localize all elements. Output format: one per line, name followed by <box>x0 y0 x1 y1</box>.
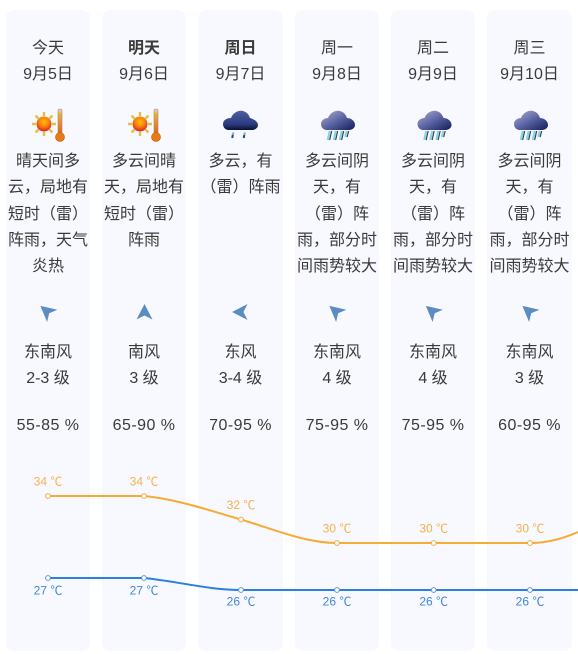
line chart: daily low temperature: 26 ℃ <box>516 594 544 608</box>
weather description: Monday: （雷）阵 <box>305 206 369 223</box>
weather description: Sunday: （雷）阵雨 <box>200 179 280 196</box>
icon: heavy showers, Wednesday <box>514 111 548 140</box>
date: 9月9日: 9月9日 <box>408 66 458 83</box>
weather description: today <box>8 152 88 275</box>
wind level: Tuesday: 4 级 <box>418 370 448 387</box>
day label: Monday: 周一 <box>321 40 353 57</box>
date: 9月7日: 9月7日 <box>216 66 265 83</box>
line chart: daily low temperature: 26 ℃ <box>323 594 351 608</box>
icon: heavy showers, Monday <box>321 111 355 140</box>
weather description: today: 阵雨，天气 <box>8 232 88 249</box>
wind arrow: tomorrow <box>136 304 152 320</box>
date: 9月10日: 9月10日 <box>500 66 559 83</box>
weather description: Monday: 天，有 <box>313 179 361 196</box>
date: 9月5日: 9月5日 <box>23 66 73 83</box>
weather description: Monday: 雨，部分时 <box>297 232 377 249</box>
wind direction: Sunday: 东风 <box>224 344 256 361</box>
icon: sunny hot, today <box>32 109 64 142</box>
wind direction: Tuesday: 东南风 <box>409 344 457 361</box>
weather description: Wednesday: 雨，部分时 <box>489 232 570 249</box>
weather description: Monday: 间雨势较大 <box>297 258 377 275</box>
humidity: Monday: 75-95 % <box>306 417 368 434</box>
weather description: today: 炎热 <box>32 258 64 275</box>
icon: sunny hot, tomorrow <box>128 109 160 142</box>
day label: Wednesday: 周三 <box>513 40 546 57</box>
wind arrow: Monday <box>324 300 346 322</box>
weather description: Tuesday: 天，有 <box>409 179 457 196</box>
line chart: daily high temperature: 34 ℃ <box>130 474 158 488</box>
panel: today column <box>6 10 90 651</box>
weather description: tomorrow: 短时（雷） <box>104 206 184 223</box>
weather description: Wednesday: 多云间阴 <box>497 153 562 170</box>
weather description: today: 晴天间多 <box>16 153 80 170</box>
weather description: tomorrow: 天，局地有 <box>104 179 184 196</box>
weather description: Wednesday: （雷）阵 <box>497 206 562 223</box>
panel: Tuesday column <box>391 10 475 651</box>
icon: showers, Sunday <box>223 111 258 138</box>
line chart: daily low temperature <box>34 576 578 608</box>
line chart: daily high temperature: 32 ℃ <box>227 498 255 512</box>
humidity: Wednesday: 60-95 % <box>498 417 561 434</box>
line chart: daily low temperature: 27 ℃ <box>34 584 62 598</box>
day label: Tuesday: 周二 <box>417 40 449 57</box>
panel: tomorrow column <box>102 10 186 651</box>
weather description: Wednesday: 间雨势较大 <box>489 258 570 275</box>
line chart: daily low temperature: 27 ℃ <box>130 584 158 598</box>
date: 9月8日: 9月8日 <box>312 66 362 83</box>
humidity: today: 55-85 % <box>17 417 79 434</box>
weather description: today: 短时（雷） <box>8 206 88 223</box>
panel: Wednesday column <box>487 10 572 651</box>
weather description: Monday <box>297 152 377 275</box>
weather description: Sunday: 多云，有 <box>208 153 272 170</box>
weather description: Tuesday: 多云间阴 <box>401 153 465 170</box>
weather description: tomorrow: 多云间晴 <box>112 153 176 170</box>
weather description: Tuesday <box>393 152 473 275</box>
weather description: Tuesday: 间雨势较大 <box>393 258 473 275</box>
humidity: tomorrow: 65-90 % <box>113 417 175 434</box>
line chart: daily high temperature: 30 ℃ <box>516 522 544 536</box>
line chart: daily low temperature: 26 ℃ <box>227 594 255 608</box>
date: 9月6日: 9月6日 <box>119 66 169 83</box>
wind direction: Wednesday: 东南风 <box>505 344 554 361</box>
line chart: daily high temperature: 30 ℃ <box>323 522 351 536</box>
weather description: Tuesday: （雷）阵 <box>401 206 465 223</box>
day label: tomorrow: 明天 <box>128 40 160 57</box>
wind level: tomorrow: 3 级 <box>129 370 159 387</box>
line chart: daily high temperature: 34 ℃ <box>34 474 62 488</box>
wind level: Wednesday: 3 级 <box>515 370 544 387</box>
wind direction: tomorrow: 南风 <box>128 344 160 361</box>
wind arrow: today <box>35 300 57 322</box>
panel: Sunday column <box>198 10 283 651</box>
day label: Sunday: 周日 <box>224 40 256 57</box>
wind arrow: Wednesday <box>517 300 539 322</box>
wind level: Monday: 4 级 <box>322 370 352 387</box>
humidity: Sunday: 70-95 % <box>209 417 272 434</box>
line chart: daily high temperature: 30 ℃ <box>419 522 448 536</box>
wind level: Sunday: 3-4 级 <box>219 370 262 387</box>
weather description: Monday: 多云间阴 <box>305 153 369 170</box>
weather description: tomorrow: 阵雨 <box>128 232 160 249</box>
wind direction: today: 东南风 <box>24 344 72 361</box>
humidity: Tuesday: 75-95 % <box>402 417 464 434</box>
panel: Monday column <box>295 10 379 651</box>
wind level: today: 2-3 级 <box>26 370 70 387</box>
weather description: Wednesday <box>489 152 570 275</box>
line chart: daily high temperature <box>34 474 578 545</box>
line chart: daily low temperature: 26 ℃ <box>419 594 448 608</box>
day label: today: 今天 <box>32 40 64 57</box>
wind direction: Monday: 东南风 <box>313 344 361 361</box>
weather description: tomorrow <box>104 152 184 249</box>
weather description: today: 云，局地有 <box>8 179 88 196</box>
wind arrow: Sunday <box>232 304 248 320</box>
wind arrow: Tuesday <box>421 300 443 322</box>
weather description: Tuesday: 雨，部分时 <box>393 232 473 249</box>
weather description: Sunday <box>200 152 280 196</box>
icon: heavy showers, Tuesday <box>418 111 452 140</box>
weather description: Wednesday: 天，有 <box>505 179 554 196</box>
